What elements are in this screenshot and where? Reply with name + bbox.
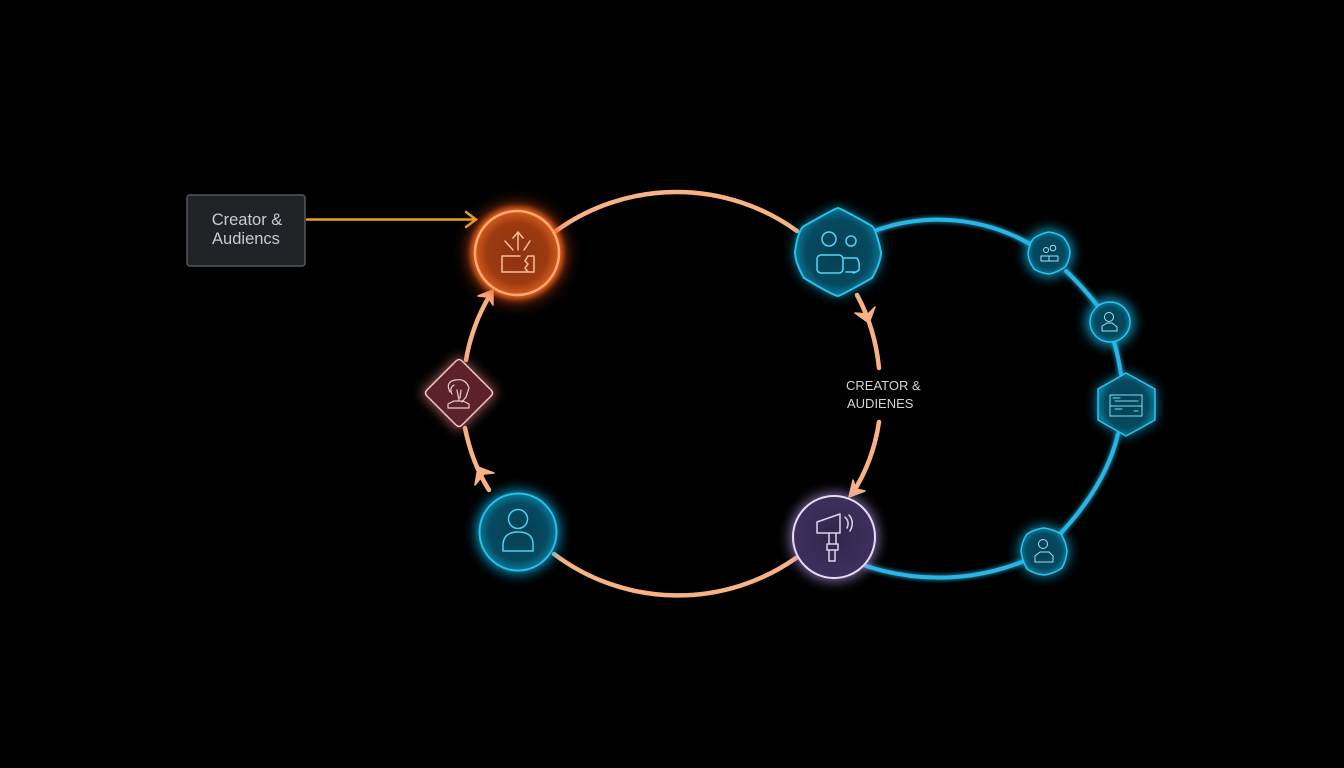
arc: left lower with arrow: [465, 428, 494, 490]
node: small blue bottom: [1019, 526, 1069, 576]
arc: top: [556, 192, 797, 231]
box: Creator & Audiences: [187, 195, 305, 266]
node: blue creators hexagon: [795, 208, 881, 296]
box: Creator & Audiences: Creator &: [212, 211, 282, 229]
node: blue audience circle: [476, 490, 560, 574]
node: small blue person: [1086, 298, 1134, 346]
node: orange launch: [471, 207, 563, 299]
icon: person: [503, 510, 533, 551]
arc: left upper with arrow: [466, 290, 493, 360]
icon: group: [1041, 245, 1058, 261]
icon: card: [1110, 395, 1142, 416]
orange main loop: [465, 192, 879, 595]
label: center: AUDIENES: [847, 396, 914, 411]
icon: creators: [817, 232, 859, 273]
icon: person: [1035, 540, 1053, 562]
arc: right upper with arrow: [855, 295, 879, 368]
icon: megaphone: [817, 514, 852, 561]
label: center: [846, 378, 921, 411]
label: center: CREATOR &: [846, 378, 921, 393]
arc: right lower with arrow: [849, 422, 879, 497]
icon: head with headset: [448, 380, 469, 408]
box: Creator & Audiences: Audiencs: [212, 230, 280, 248]
node: purple megaphone: [790, 493, 878, 581]
node: small blue top: [1025, 229, 1073, 277]
arrow: box to orange node: [307, 212, 476, 227]
node: red diamond: [421, 356, 497, 431]
arc: bottom: [554, 554, 796, 595]
icon: box with arrow: [502, 232, 534, 272]
blue outer loop: [866, 220, 1121, 578]
icon: person: [1102, 312, 1117, 331]
node: blue hexagon card: [1098, 373, 1155, 436]
